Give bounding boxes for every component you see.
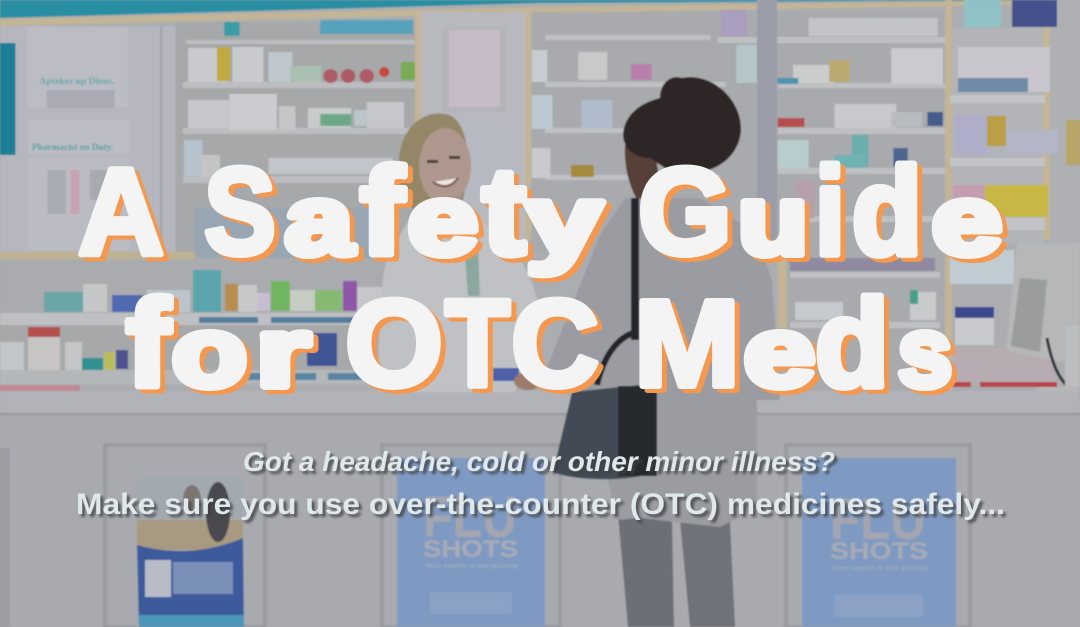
poster: flu shots right: Your health is our priority (832, 565, 928, 572)
title text: O (345, 276, 443, 413)
title text: A (78, 144, 164, 281)
title shadow: i (820, 147, 850, 285)
title shadow: s (903, 301, 957, 411)
title shadow: G (643, 148, 737, 285)
subtitle shadow: Got a headache, cold or other minor illness? (246, 449, 838, 480)
lower right shelf unit (785, 180, 945, 390)
title shadow: r (261, 301, 315, 411)
left notice panels (0, 26, 186, 254)
title shadow: y (531, 169, 607, 279)
title shadow: T (450, 280, 515, 417)
customer head and hair (623, 77, 741, 200)
title shadow: M (639, 280, 745, 417)
customer cardigan (545, 198, 780, 527)
title shadow: t (487, 147, 531, 285)
computer monitor (1006, 243, 1080, 398)
title shadow: d (820, 279, 894, 417)
poster: allergy (137, 477, 244, 627)
title text: e (408, 165, 478, 275)
title shadow: S (209, 148, 281, 285)
support post (757, 0, 777, 250)
title text: d (852, 143, 922, 281)
title shadow: O (350, 280, 448, 417)
title text: r (256, 297, 310, 407)
door panel and posters (415, 12, 531, 255)
title shadow: A (83, 148, 169, 285)
title text: s (898, 297, 952, 407)
poster: flu shots left (397, 458, 545, 627)
subtitle shadow: Make sure you use over-the-counter (OTC) medicines safely... (79, 491, 1008, 524)
subtitle (76, 446, 1008, 524)
title text: a (285, 165, 355, 275)
poster: flu shots left: Your health is our priority (425, 563, 518, 570)
title shadow: e (413, 169, 483, 279)
poster: flu shots left: SHOTS (423, 536, 518, 563)
title shadow (83, 147, 1007, 417)
title (78, 143, 1007, 417)
left shelf unit (176, 20, 415, 258)
counter (0, 391, 1080, 627)
title text: t (482, 143, 526, 281)
title text: e (932, 165, 1002, 275)
title shadow: d (857, 147, 927, 285)
title shadow: C (516, 280, 604, 417)
poster: flu shots right: FLU (830, 487, 926, 552)
customer legs (618, 515, 735, 627)
title text: M (634, 276, 740, 413)
left notice panels: Apteker op Diens. (39, 76, 114, 87)
lower left shelves (0, 259, 385, 392)
pharmacist (378, 114, 543, 392)
title text: e (744, 297, 815, 407)
title shadow: e (749, 301, 820, 411)
title text (78, 143, 1002, 413)
title text: G (638, 144, 732, 281)
title text: C (511, 276, 599, 413)
title text: T (445, 276, 510, 413)
centre and right shelf unit (532, 10, 948, 252)
title text: f (360, 143, 405, 281)
poster: flu shots right: SHOTS (830, 538, 928, 565)
title text: u (738, 165, 808, 275)
title shadow: o (177, 301, 252, 411)
subtitle line 1: Got a headache, cold or other minor illness? (243, 446, 835, 477)
title shadow: e (937, 169, 1007, 279)
poster: flu shots right (802, 458, 956, 627)
title shadow: a (290, 169, 360, 279)
title shadow: u (743, 169, 813, 279)
title shadow: f (365, 147, 410, 285)
title shadow: f (131, 279, 176, 417)
tan ceiling rail (0, 0, 1080, 26)
title text: S (204, 144, 276, 281)
tan shelf rail (0, 252, 195, 259)
subtitle shadow (79, 449, 1008, 524)
teal header band (0, 0, 1080, 18)
far right column (950, 0, 1080, 387)
title text: o (172, 297, 247, 407)
title text: f (126, 275, 171, 413)
title text: d (815, 275, 889, 413)
title text: y (526, 165, 602, 275)
shoulder bag (553, 198, 657, 479)
title text: i (815, 143, 845, 281)
left notice panels: Pharmacist on Duty. (32, 142, 113, 152)
poster: flu shots left: FLU (423, 485, 517, 550)
subtitle line 2: Make sure you use over-the-counter (OTC) medicines safely... (76, 488, 1005, 521)
